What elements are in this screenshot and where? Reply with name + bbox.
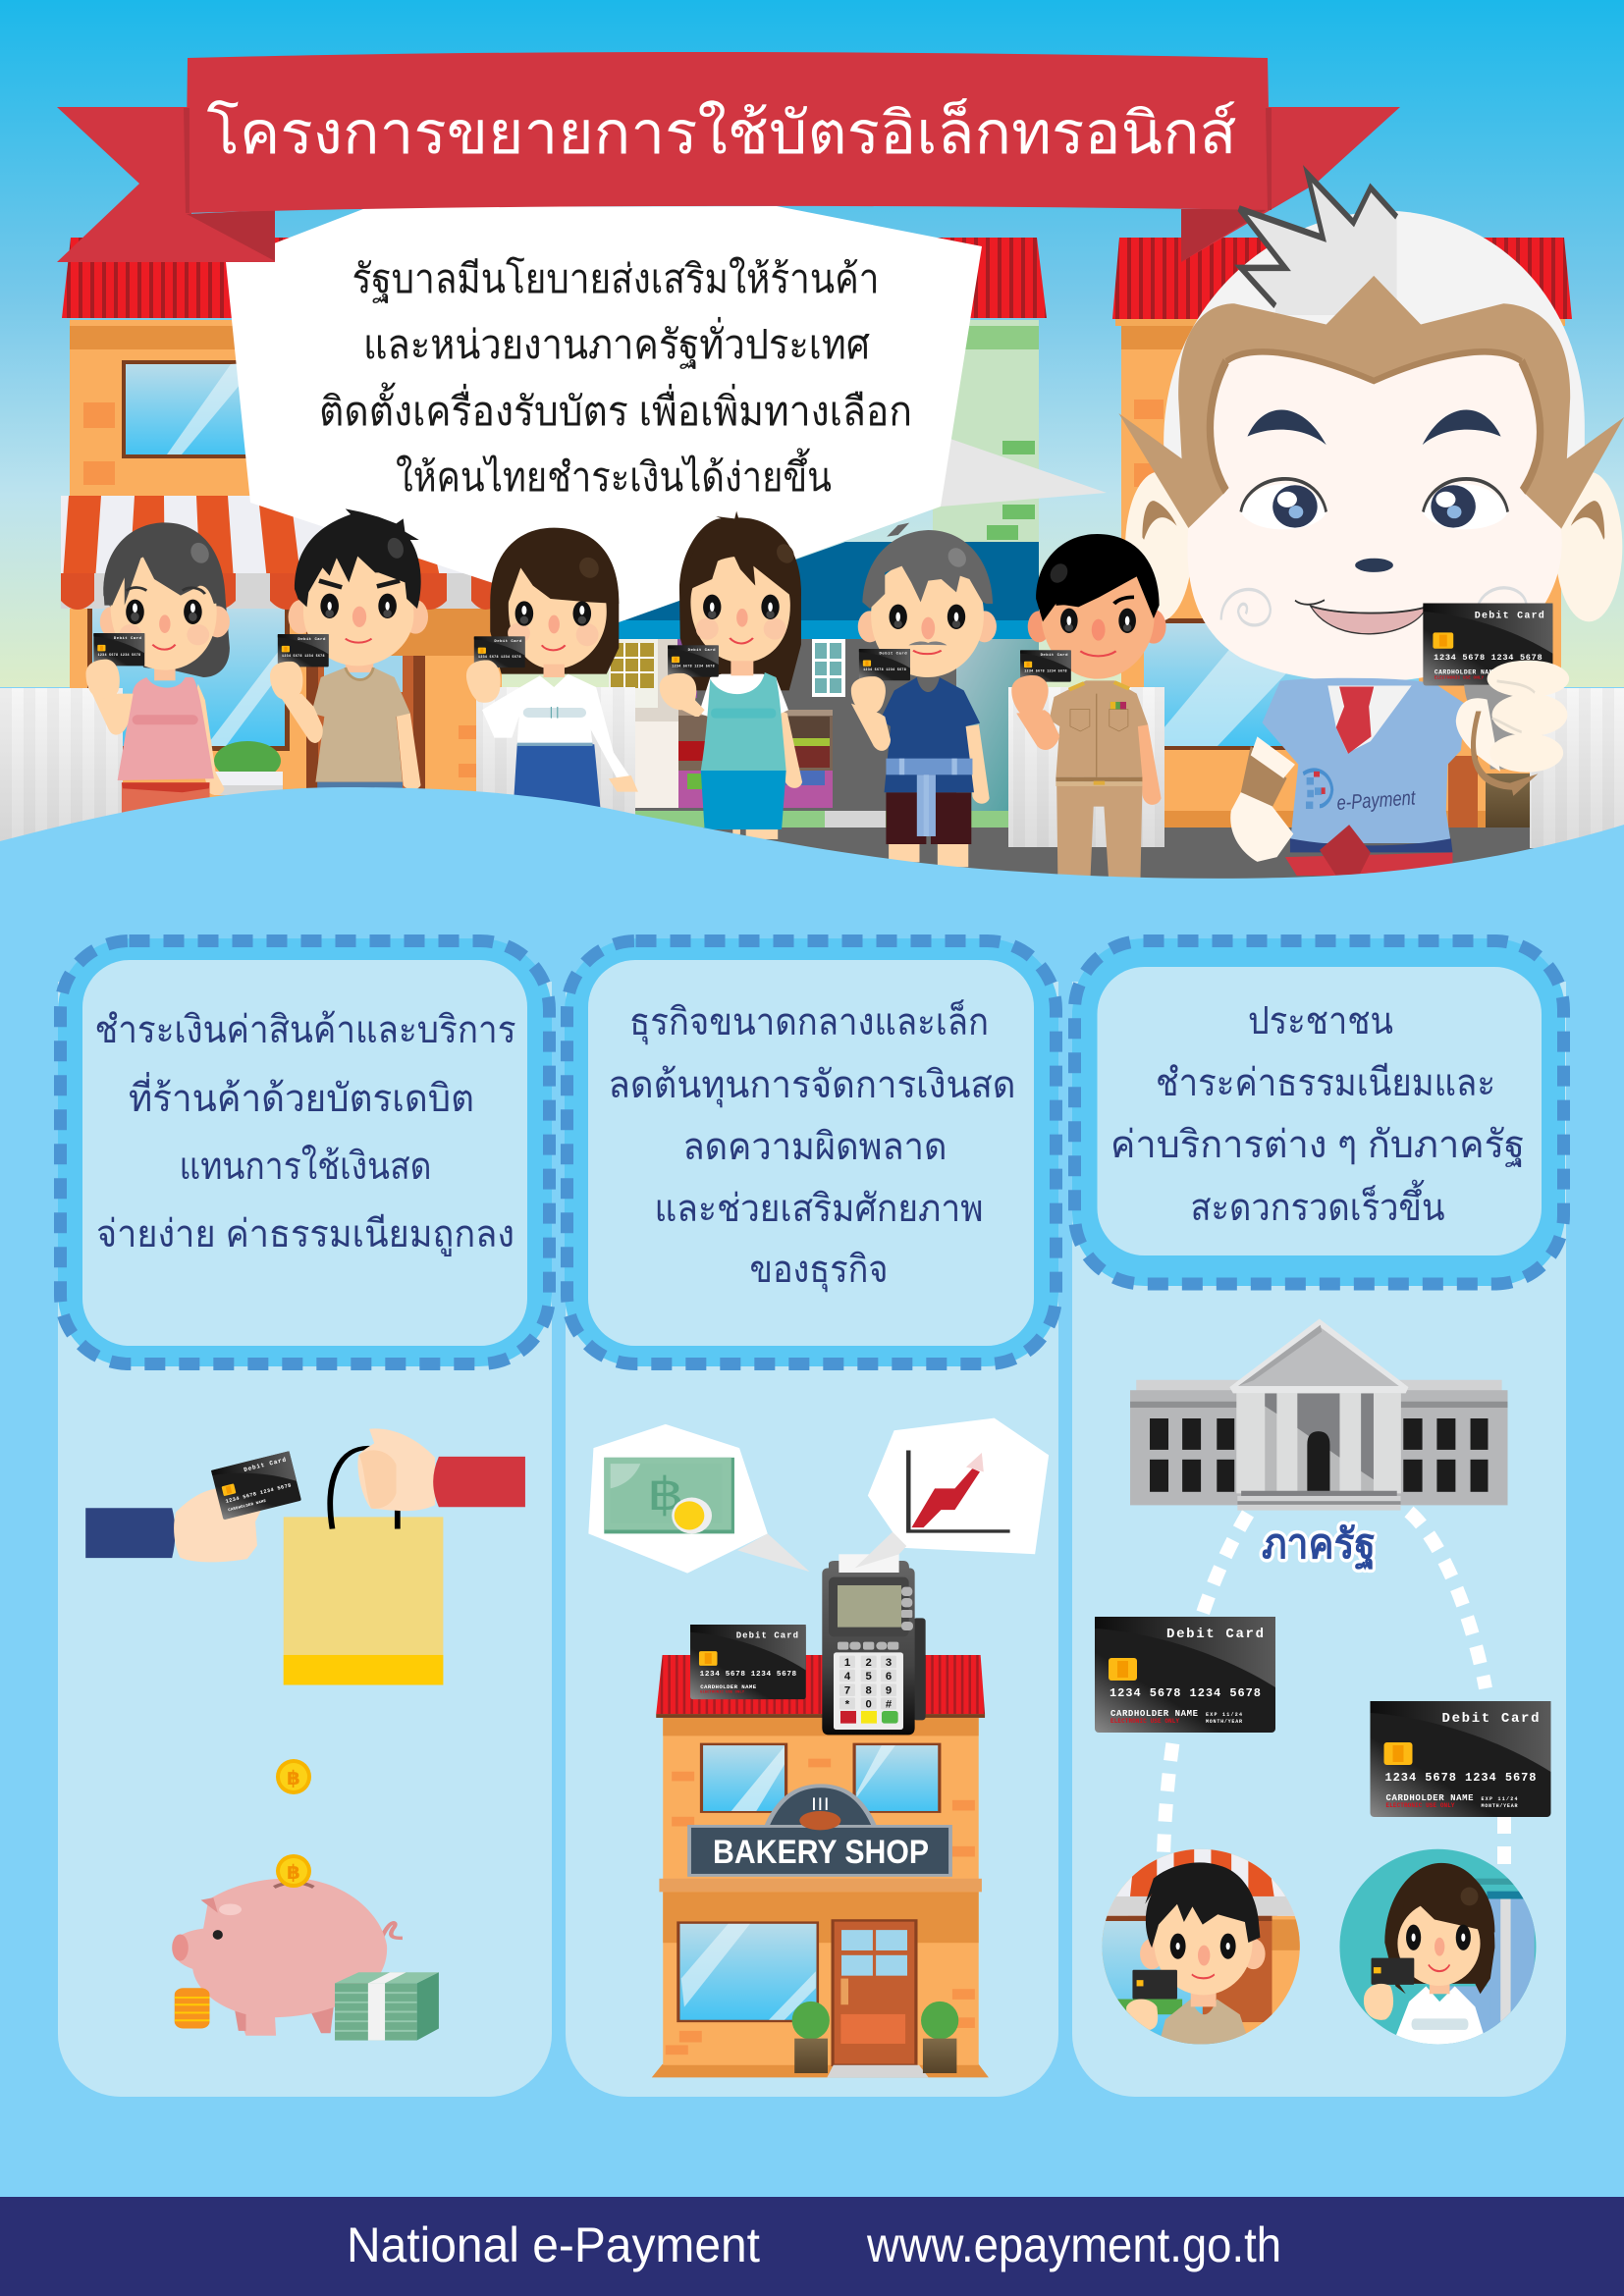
card on roof: 1234 5678 1234 5678: [700, 1671, 797, 1679]
right arm: [189, 684, 225, 795]
man's shirt: [1159, 2000, 1250, 2046]
pig snout and eye: [172, 1930, 223, 1961]
mascot debit card: 1234 5678 1234 5678: [1434, 653, 1543, 663]
brows: [319, 581, 400, 587]
portrait background: [1338, 1847, 1538, 2053]
eyes: [703, 595, 780, 619]
money thought bubble: [588, 1424, 809, 1574]
blue skirt: [701, 771, 786, 829]
card on roof: ELECTRONIC USE ONLY: [700, 1691, 745, 1695]
chart thought bubble: [868, 1418, 1049, 1554]
small debit card: 1234 5678 1234 5678: [672, 664, 715, 667]
left arm: [1016, 710, 1059, 750]
right arm: [397, 714, 421, 789]
eyes: [126, 600, 202, 624]
piggy bank: [172, 1878, 403, 2036]
mascot eyes: [1241, 479, 1508, 529]
nose and smile: [1080, 619, 1116, 656]
bakery illustration: [588, 1418, 1049, 2077]
small debit card: Debit Card: [494, 639, 522, 644]
fist: [851, 676, 886, 714]
panel 3 background: [1072, 982, 1566, 2097]
mascot mouth: [1295, 600, 1427, 634]
man's card and fist: [1126, 1970, 1177, 2030]
falling coin: [276, 1759, 311, 1794]
pig legs: [234, 2002, 334, 2036]
mascot debit card: CARDHOLDER NAME: [1435, 668, 1497, 675]
face: [871, 561, 984, 677]
bangs: [492, 528, 619, 606]
banknote: ฿: [647, 1469, 684, 1520]
panel 3: citizens and government: [1072, 938, 1566, 2097]
fence slats: [0, 687, 1624, 848]
footer bar: [0, 2197, 1624, 2296]
nose, moustache, smile: [908, 617, 947, 654]
panel 2 text: ลดต้นทุนการจัดการเงินสด: [609, 1064, 1015, 1108]
man's eyes and smile: [1170, 1934, 1236, 1978]
khaki shirt: [1050, 680, 1148, 777]
panel 2: businesses: [565, 938, 1058, 2097]
small debit card: [93, 633, 144, 666]
panel 1 inner box: [82, 960, 527, 1346]
ears and neck: [858, 611, 882, 642]
eyes: [1060, 609, 1136, 633]
legs: [889, 844, 968, 867]
large debit card 2: EXP 11/24: [1481, 1796, 1518, 1802]
shirt details: [1069, 682, 1129, 777]
woman's eyes and smile: [1406, 1925, 1471, 1971]
rotated debit card in hand: Debit Card: [244, 1457, 287, 1473]
paper roll: [839, 1554, 899, 1573]
small debit card: [668, 645, 719, 677]
mascot collar and tie: [1327, 686, 1412, 754]
citizen portrait: man at shop: [1101, 1849, 1301, 2048]
card payment terminal: [822, 1532, 926, 1735]
mascot debit card: [1423, 604, 1552, 686]
eyes: [320, 594, 397, 618]
panel 1 text: ชำระเงินค่าสินค้าและบริการ: [94, 1009, 516, 1051]
right arm: [1137, 724, 1162, 805]
mascot ears: [1125, 472, 1622, 621]
road and grass: [628, 811, 1624, 887]
left arm: [281, 694, 323, 743]
steps: [1237, 1491, 1401, 1511]
white fences: [0, 687, 1624, 848]
panel 3 text: ชำระค่าธรรมเนียมและ: [1156, 1062, 1495, 1104]
rotated debit card in hand: [211, 1451, 301, 1520]
eyes: [889, 605, 965, 629]
large debit card 1: ELECTRONIC USE ONLY: [1110, 1718, 1179, 1725]
eyes: [515, 601, 591, 626]
keypad: [834, 1652, 903, 1730]
blue sleeve: [85, 1508, 175, 1558]
small debit card: Debit Card: [114, 636, 141, 641]
panel 1 text: [94, 1009, 516, 1256]
panel 3 text: สะดวกรวดเร็วขึ้น: [1190, 1179, 1445, 1229]
fist and arm: [660, 673, 705, 717]
citizen portrait: government employee: [1338, 1847, 1538, 2053]
panel 3 text: [1110, 1000, 1525, 1229]
face: [509, 553, 607, 669]
bangs: [103, 523, 226, 606]
panel 2 dashed frame: [565, 938, 1058, 1366]
mascot face: [1187, 351, 1562, 682]
speech bubble text: รัฐบาลมีนโยบายส่งเสริมให้ร้านค้า: [352, 256, 880, 303]
terminal side: [913, 1618, 926, 1720]
panel 2 text: ธุรกิจขนาดกลางและเล็ก: [629, 998, 989, 1045]
khaki trousers: [1056, 785, 1142, 878]
arm right: [778, 710, 802, 788]
ears: [1028, 611, 1051, 642]
large debit card 2: [1371, 1701, 1551, 1817]
sky background: [0, 0, 1624, 687]
rotated debit card in hand: 1234 5678 1234 5678: [225, 1483, 292, 1505]
ribbon edge shading: [184, 108, 1272, 213]
side and function buttons: [838, 1587, 913, 1650]
mascot shirt label: e-Payment: [1336, 786, 1417, 815]
coin slot: [274, 1883, 313, 1888]
long hair: [679, 511, 801, 690]
banknote stack: [335, 1972, 439, 2041]
right hand: [609, 775, 638, 792]
spiky hair: [295, 508, 421, 609]
ribbon left fold: [187, 210, 275, 261]
tan t-shirt: [311, 667, 410, 782]
fist: [1011, 675, 1049, 717]
banknote: [604, 1458, 734, 1533]
small debit card: Debit Card: [880, 652, 907, 657]
mascot tan crown: [1118, 276, 1624, 530]
keypad: 1: [844, 1657, 850, 1669]
illustration: hands exchanging card and bag: [85, 1428, 525, 1685]
small debit card: [1020, 650, 1071, 682]
panel 2 text: และช่วยเสริมศักยภาพ: [654, 1188, 984, 1230]
small debit card: 1234 5678 1234 5678: [282, 655, 325, 659]
fist: [466, 661, 501, 703]
large debit card 1: CARDHOLDER NAME: [1110, 1709, 1199, 1719]
left and middle shop roof: [62, 238, 1047, 318]
seller hand: [357, 1428, 435, 1511]
large debit card 1: 1234 5678 1234 5678: [1110, 1686, 1261, 1700]
mascot nose: [1355, 559, 1393, 572]
nose and smile: [730, 609, 753, 643]
storefront window: [677, 1921, 819, 2022]
speech bubble text: ติดตั้งเครื่องรับบัตร เพื่อเพิ่มทางเลือก: [319, 382, 912, 434]
pig ear: [201, 1897, 218, 1913]
panel 1: paying at shops: [58, 938, 552, 2097]
bush and planter: [214, 741, 283, 795]
panel 2 background: [566, 982, 1058, 2097]
rotated debit card in hand: CARDHOLDER NAME: [228, 1500, 267, 1513]
pig body: [174, 1878, 387, 2017]
speech bubble text: ให้คนไทยชำระเงินได้ง่ายขึ้น: [396, 448, 832, 500]
title text: โครงการขยายการใช้บัตรอิเล็กทรอนิกส์: [206, 98, 1237, 166]
large debit card 1: [1095, 1617, 1275, 1733]
large debit card 1: EXP 11/24: [1206, 1712, 1242, 1718]
panel 2 text: [609, 998, 1015, 1293]
panel 2 text: ลดความผิดพลาด: [683, 1126, 947, 1168]
windows: [1150, 1418, 1488, 1492]
pediment: [1229, 1319, 1408, 1393]
potted plants: [792, 2002, 958, 2073]
shopping bag: [284, 1448, 443, 1685]
mascot hair spikes: [1239, 174, 1397, 315]
white shirt: [699, 674, 788, 717]
footer website: www.epayment.go.th: [866, 2217, 1281, 2272]
keypad: 7: [844, 1685, 850, 1697]
black hair: [1036, 534, 1160, 621]
speech bubble text: และหน่วยงานภาครัฐทั่วประเทศ: [363, 317, 870, 369]
panel 1 dashed frame: [58, 938, 552, 1366]
small debit card: [474, 636, 525, 667]
card on roof: Debit Card: [736, 1631, 798, 1641]
line chart: [908, 1451, 1010, 1531]
footer left label: National e-Payment: [347, 2217, 760, 2272]
woman's blouse: [1392, 1986, 1487, 2046]
mascot debit card: ELECTRONIC USE ONLY: [1435, 675, 1485, 680]
pink top: [118, 677, 214, 780]
large debit card 2: ELECTRONIC USE ONLY: [1386, 1802, 1455, 1809]
card on roof: CARDHOLDER NAME: [700, 1683, 757, 1690]
person 5: older man with loincloth: [851, 523, 997, 867]
person 6: civil servant in khaki uniform: [1011, 534, 1166, 878]
right arm: [966, 724, 990, 804]
keypad: 3: [886, 1657, 892, 1669]
door: [833, 1920, 916, 2065]
government label: ภาครัฐ: [1262, 1521, 1376, 1571]
small debit card: 1234 5678 1234 5678: [1024, 668, 1067, 672]
middle shop green wall: [933, 320, 1039, 556]
keypad: 2: [865, 1657, 872, 1669]
face: [690, 557, 790, 663]
large debit card 2: Debit Card: [1441, 1711, 1540, 1727]
white blouse: [482, 674, 631, 785]
gray hair: [862, 530, 993, 609]
mascot hand: [1456, 661, 1569, 796]
panel 3 text: ประชาชน: [1248, 1000, 1393, 1042]
legs: [732, 828, 778, 839]
keypad: 5: [865, 1671, 872, 1682]
large debit card 2: MONTH/YEAR: [1481, 1803, 1518, 1809]
scene: street with shops behind the people: [0, 238, 1624, 887]
large debit card 2: CARDHOLDER NAME: [1386, 1793, 1474, 1803]
left shop upper window: [122, 360, 249, 458]
bangs: [682, 518, 801, 599]
ribbon main band: [186, 52, 1271, 213]
ribbon right fold: [1181, 209, 1268, 262]
bricks: [666, 1759, 975, 2055]
panel 1 text: แทนการใช้เงินสด: [179, 1145, 432, 1188]
brick patches: [459, 725, 488, 739]
shop sign: [689, 1786, 950, 1875]
mascot belt and sash: [1285, 825, 1452, 876]
card on roof: [690, 1625, 806, 1699]
left arm: [851, 704, 891, 751]
upper windows: [700, 1743, 941, 1813]
panel 1 background: [58, 982, 552, 2097]
speech bubble: [226, 206, 982, 622]
large debit card 1: Debit Card: [1166, 1627, 1264, 1642]
terminal body: [822, 1561, 915, 1735]
bakery sign text: BAKERY SHOP: [713, 1834, 929, 1871]
small debit card: [859, 649, 910, 680]
navy shirt: [880, 677, 980, 792]
woman's face: [1397, 1877, 1494, 1995]
nose and smile: [346, 607, 372, 643]
ears and neck: [289, 600, 313, 634]
back hair: [103, 522, 230, 677]
blue skirt: [513, 744, 601, 818]
fist: [270, 662, 302, 701]
left arm: [87, 684, 134, 735]
keypad: 6: [886, 1671, 892, 1682]
speech bubble tail: [941, 439, 1107, 507]
nose and smile: [542, 615, 566, 650]
terminal screen: [829, 1577, 909, 1636]
person 4: woman in teal top: [660, 511, 802, 839]
red sleeve: [433, 1457, 525, 1507]
shop wall: [652, 1718, 989, 2077]
man's hair: [1145, 1862, 1260, 1948]
keypad: 4: [844, 1671, 851, 1682]
man's head: [1140, 1904, 1266, 2006]
person 3: woman in white blouse: [466, 528, 638, 818]
portico columns: [1236, 1393, 1401, 1493]
mascot white head: [1164, 211, 1585, 607]
middle shop front: [609, 639, 1039, 811]
mascot logo: [1303, 770, 1332, 809]
building wings: [1130, 1380, 1507, 1505]
left shop big window: [87, 608, 290, 751]
ribbon left tail: [57, 107, 275, 262]
belt: [1056, 777, 1142, 786]
keypad: 9: [886, 1685, 892, 1697]
small debit card: 1234 5678 1234 5678: [478, 655, 520, 659]
small debit card: 1234 5678 1234 5678: [98, 654, 140, 658]
coin entering slot: [276, 1854, 311, 1888]
mascot cheek swirls: [1221, 588, 1527, 625]
nose and smile: [152, 614, 176, 650]
teal top: [701, 672, 786, 771]
small debit card: Debit Card: [1041, 653, 1068, 658]
panel 2 inner box: [588, 960, 1034, 1346]
brows: [1056, 597, 1134, 604]
mascot eyebrows: [1247, 409, 1501, 445]
awning: [61, 496, 501, 656]
large debit card 2: 1234 5678 1234 5678: [1384, 1771, 1536, 1785]
panel 3 text: ค่าบริการต่าง ๆ กับภาครัฐ: [1110, 1124, 1525, 1167]
loincloth sash: [886, 759, 972, 836]
small debit card: Debit Card: [298, 637, 326, 642]
panel 1 text: ที่ร้านค้าด้วยบัตรเดบิต: [129, 1072, 474, 1120]
panel 3 inner box: [1098, 967, 1542, 1255]
keypad: #: [886, 1698, 893, 1710]
fist: [85, 660, 120, 699]
keypad: *: [845, 1698, 850, 1710]
falling coin: ฿: [287, 1768, 300, 1789]
step: [827, 2065, 929, 2077]
mascot shirt: [1262, 678, 1466, 843]
right shop: [1112, 238, 1572, 830]
left shop wall: [70, 320, 502, 830]
woman's hair: [1384, 1863, 1494, 1994]
face: [110, 553, 217, 670]
jeans: [317, 782, 403, 790]
buyer hand: [174, 1488, 263, 1562]
panel 1 text: จ่ายง่าย ค่าธรรมเนียมถูกลง: [96, 1213, 514, 1256]
small debit card: 1234 5678 1234 5678: [863, 667, 906, 671]
mascot debit card: Debit Card: [1475, 611, 1544, 621]
shop roof: [656, 1655, 985, 1718]
title ribbon: [57, 52, 1400, 262]
face: [303, 553, 413, 666]
woman's card and fist: [1364, 1958, 1414, 2020]
middle shop blue awning: [619, 542, 1039, 639]
coin entering slot: ฿: [287, 1862, 300, 1884]
coin stack: [175, 1988, 209, 2028]
long hair: [490, 528, 619, 674]
shorts: [122, 782, 210, 818]
shorts: [886, 792, 971, 844]
portrait background: [1101, 1849, 1301, 2048]
wave: blue page background: [0, 787, 1624, 2296]
small debit card: [278, 634, 329, 667]
person 1: woman in pink: [85, 522, 230, 818]
speech bubble text: [319, 256, 912, 500]
monkey mascot: [1118, 174, 1624, 876]
small debit card: Debit Card: [688, 648, 716, 653]
dashed links: [1164, 1512, 1504, 1877]
face: [1041, 562, 1155, 679]
large debit card 1: MONTH/YEAR: [1206, 1719, 1242, 1725]
left shop door: [306, 628, 425, 834]
ribbon right tail: [1181, 107, 1400, 262]
keypad: 8: [865, 1685, 872, 1697]
person 2: man in tan shirt: [270, 508, 428, 790]
government building: [1130, 1319, 1507, 1511]
pig tail: [381, 1923, 403, 1941]
panel 3 dashed frame: [1072, 938, 1565, 1286]
ledge and lower band: [659, 1879, 982, 1943]
keypad: 0: [865, 1698, 872, 1710]
panel 2 text: ของธุรกิจ: [750, 1249, 888, 1293]
mascot left arm: [1230, 736, 1295, 862]
